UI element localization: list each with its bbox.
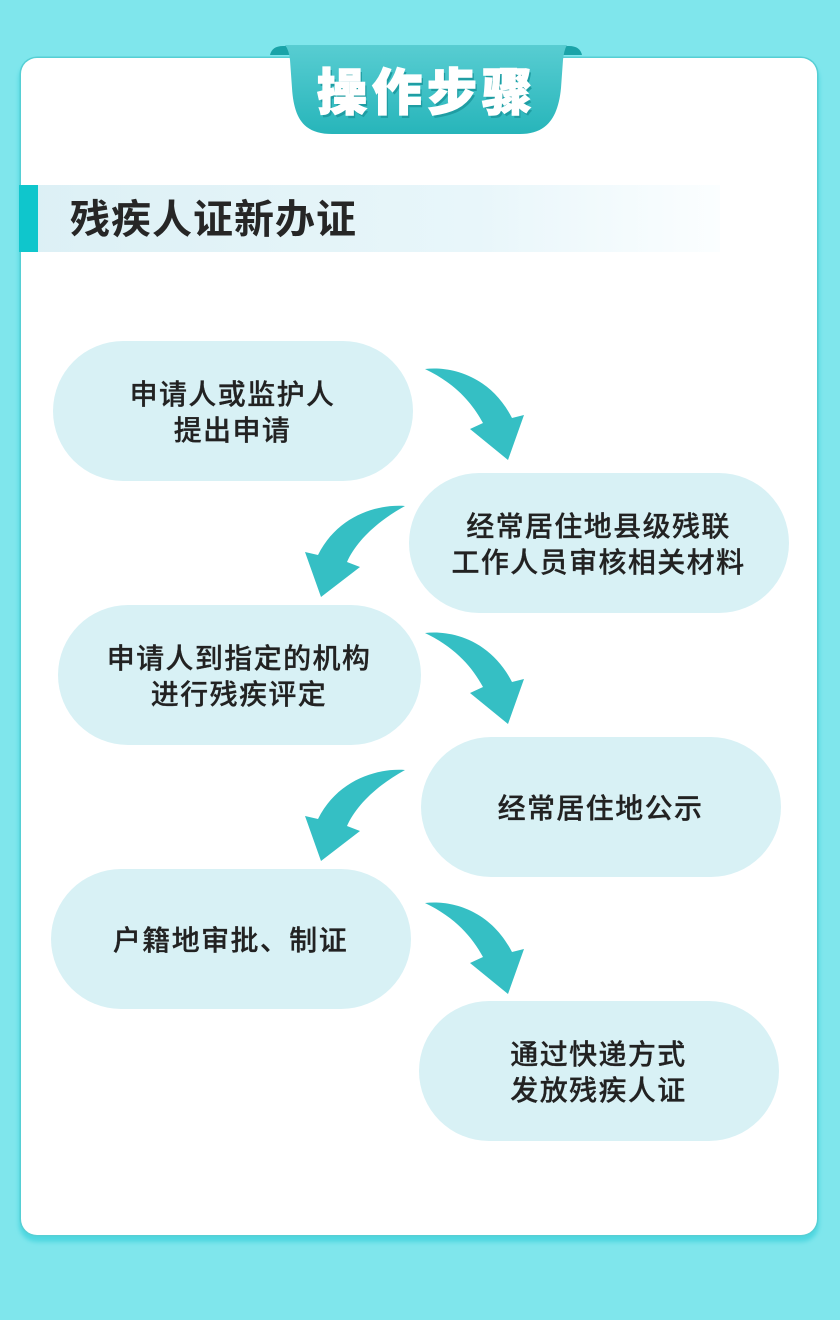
step 2: 工作人员审核相关材料 <box>451 546 746 578</box>
step 6: 发放残疾人证 <box>510 1074 687 1106</box>
step 6 <box>419 1001 779 1141</box>
arrow 5 <box>425 902 524 994</box>
step 2 <box>409 473 789 613</box>
step 1: 申请人或监护人 <box>130 378 335 410</box>
step 1 <box>53 341 413 481</box>
arrow 2 <box>305 506 405 597</box>
step 3: 申请人到指定的机构 <box>107 642 371 674</box>
step 5: 户籍地审批、制证 <box>113 924 348 956</box>
step 1: 提出申请 <box>174 414 291 446</box>
step 4 <box>421 737 781 877</box>
title text: 操作步骤 <box>317 65 537 121</box>
heading text: 残疾人证新办证 <box>70 198 357 242</box>
title ribbon <box>270 45 582 134</box>
step 6: 通过快递方式 <box>510 1038 687 1070</box>
step 3: 进行残疾评定 <box>151 678 327 710</box>
step 5 <box>51 869 411 1009</box>
section heading <box>19 185 720 252</box>
step 4: 经常居住地公示 <box>498 792 703 824</box>
arrow 1 <box>425 368 524 460</box>
step 2: 经常居住地县级残联 <box>466 510 731 542</box>
arrow 4 <box>305 770 405 861</box>
arrow 3 <box>425 632 524 724</box>
step 3 <box>58 605 421 745</box>
accent bar <box>19 185 38 252</box>
